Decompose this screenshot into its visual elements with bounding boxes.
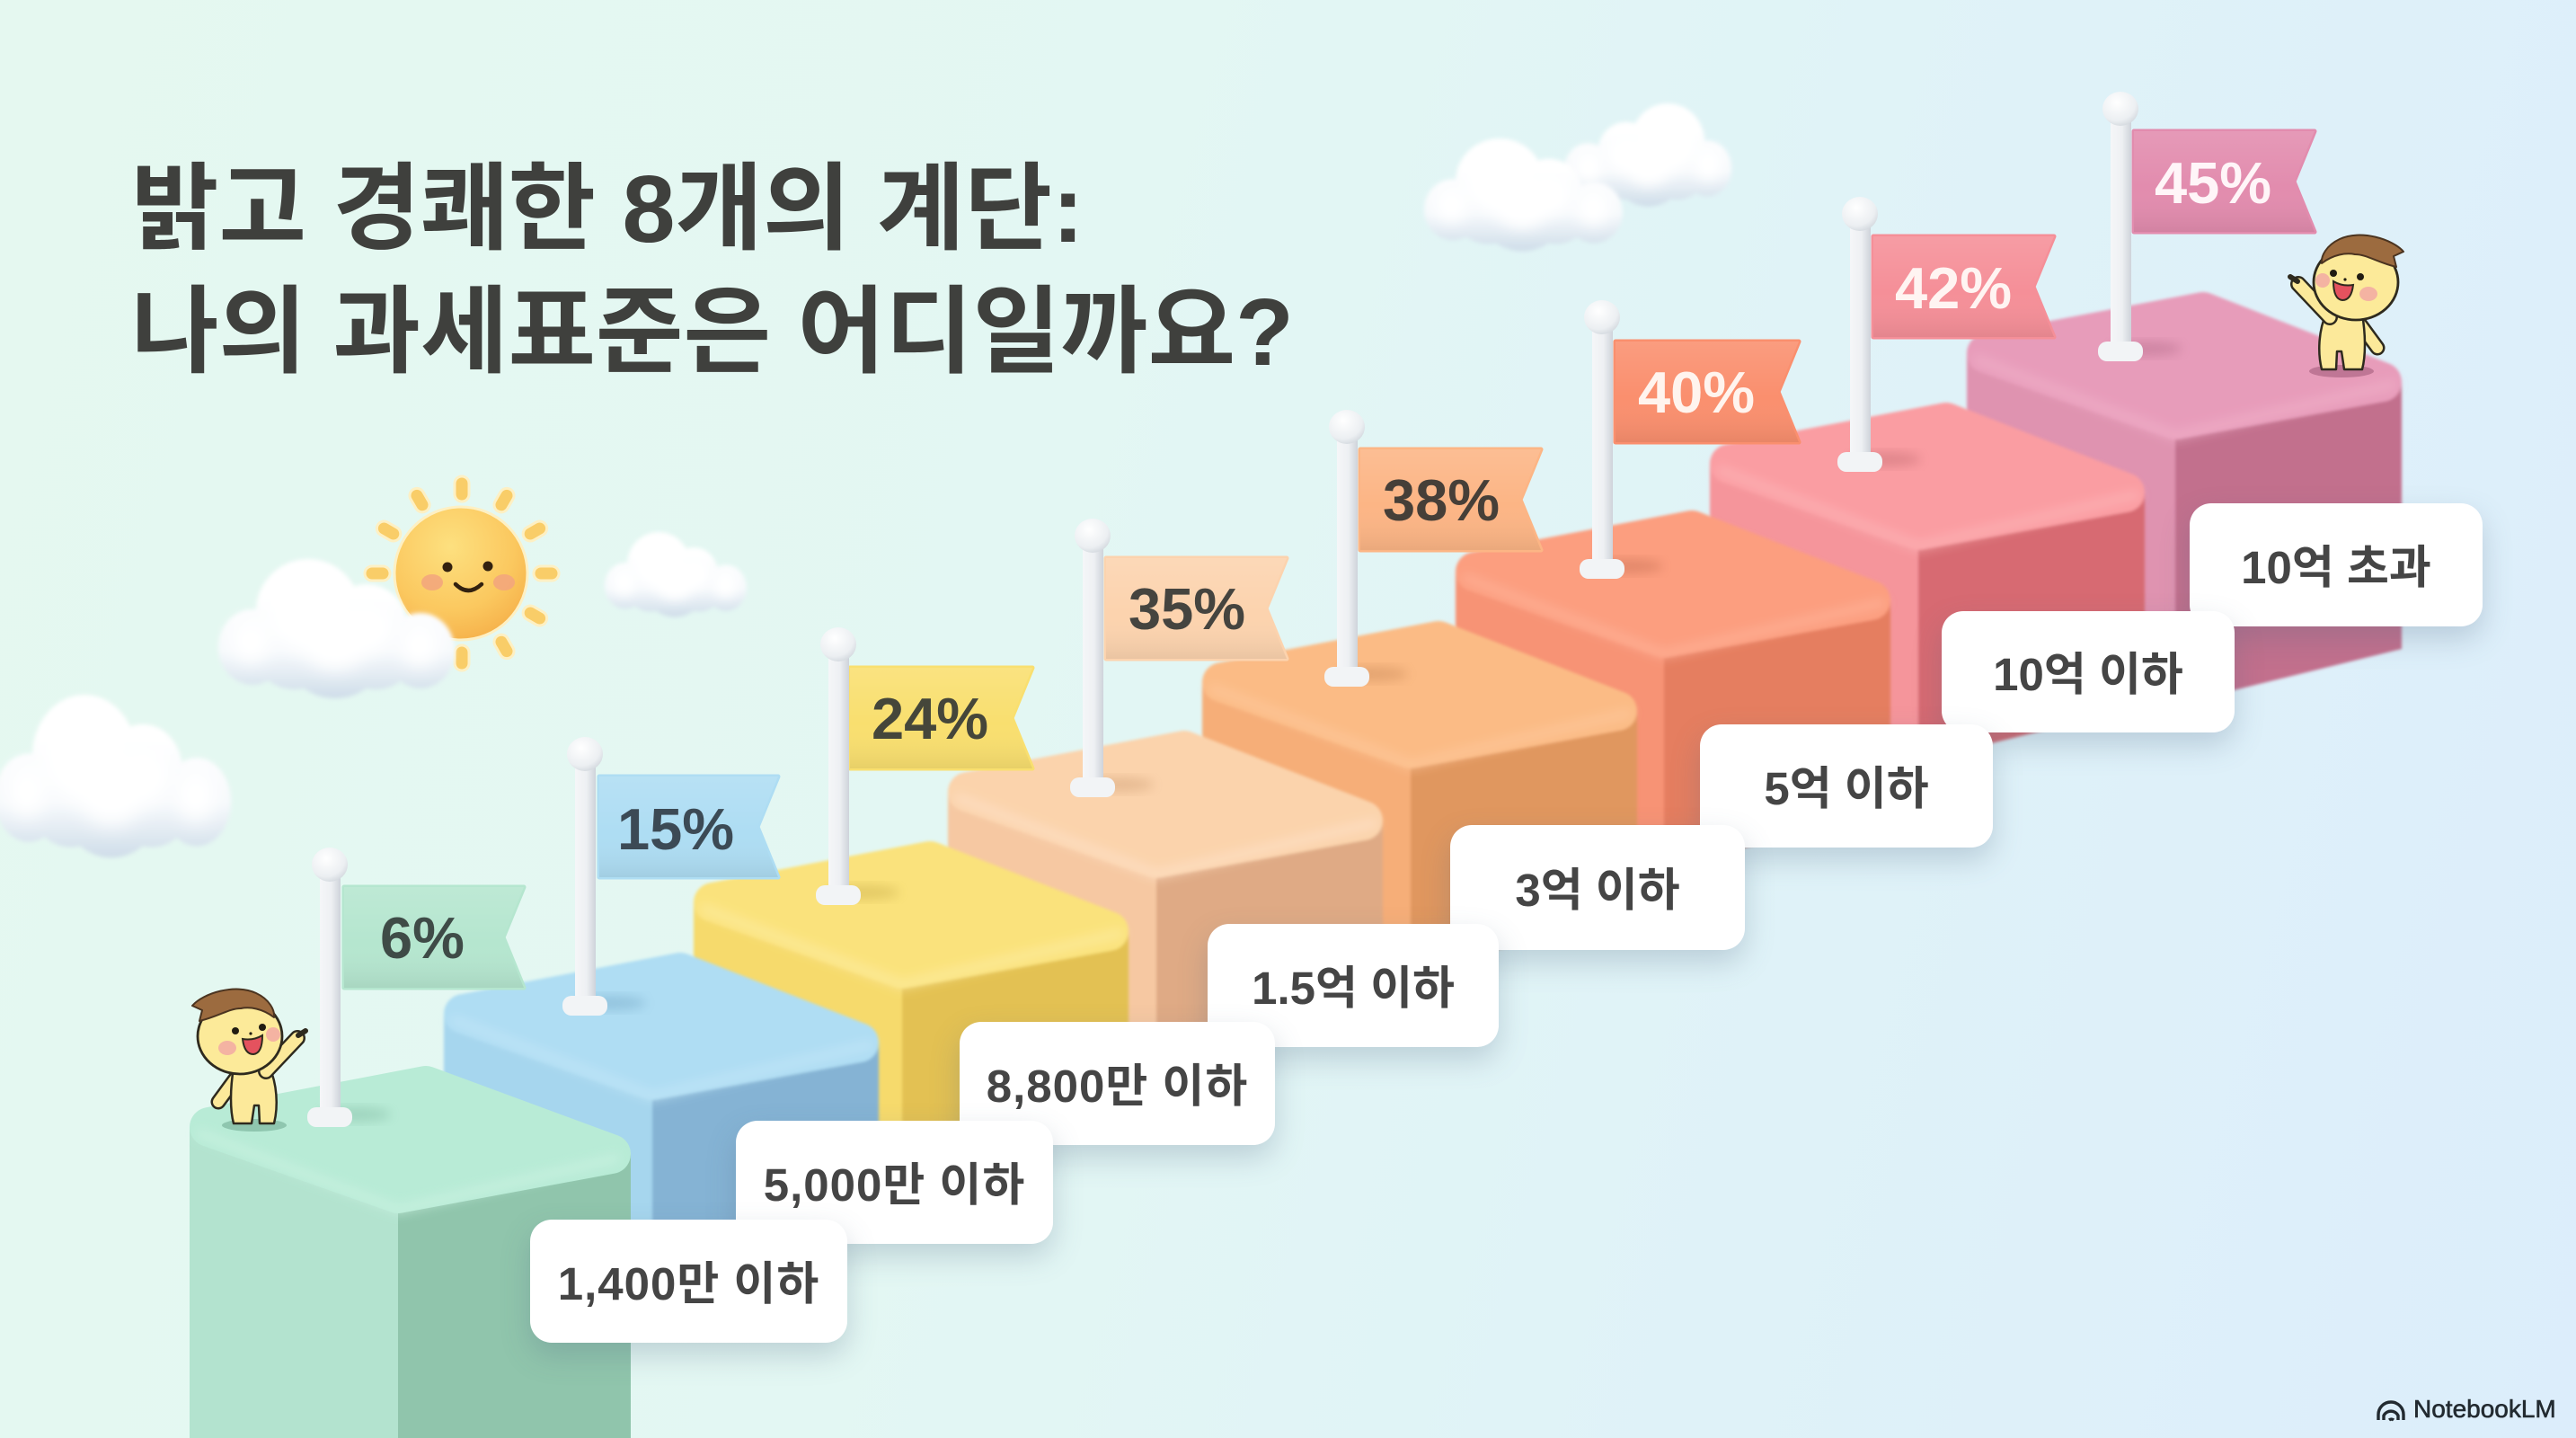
cloud: in front of sun bbox=[218, 559, 455, 698]
label: 3억 이하 bbox=[1450, 825, 1745, 950]
flag: 40%: 40% bbox=[1638, 360, 1755, 425]
flag: 15% bbox=[562, 737, 778, 1016]
flag: 35%: 35% bbox=[1129, 576, 1245, 642]
cloud: far left bbox=[0, 695, 231, 857]
stair block 7: rose bbox=[1710, 422, 2145, 761]
title: 밝고 경쾌한 8개의 계단: bbox=[131, 156, 1084, 262]
character: right, pointing at flag bbox=[2290, 235, 2403, 377]
flag: 24% bbox=[816, 627, 1032, 905]
flag: 38%: 38% bbox=[1383, 467, 1500, 533]
label: 1,400만 이하: 1,400만 이하 bbox=[558, 1258, 819, 1309]
flag: 24%: 24% bbox=[872, 686, 988, 751]
label: 5,000만 이하: 5,000만 이하 bbox=[764, 1159, 1025, 1210]
logo: NotebookLM: NotebookLM bbox=[2413, 1395, 2556, 1423]
cloud: top pair front bbox=[1424, 138, 1623, 252]
label: 5,000만 이하 bbox=[736, 1121, 1053, 1244]
label: 1.5억 이하: 1.5억 이하 bbox=[1252, 962, 1455, 1014]
flag: 35% bbox=[1070, 519, 1287, 797]
flag: 42% bbox=[1837, 197, 2054, 472]
label: 10억 초과 bbox=[2190, 503, 2483, 626]
label: 5억 이하: 5억 이하 bbox=[1764, 762, 1929, 814]
stair block 1: green bbox=[190, 1086, 631, 1438]
cloud: top pair back bbox=[1563, 103, 1731, 207]
stair block 5: orange bbox=[1202, 641, 1637, 971]
flag: 15%: 15% bbox=[617, 796, 734, 862]
flag: 6%: 6% bbox=[380, 905, 465, 971]
label: 8,800만 이하 bbox=[960, 1022, 1275, 1145]
flag: 45% bbox=[2098, 92, 2315, 361]
label: 1,400만 이하 bbox=[530, 1220, 847, 1343]
stair block 4: peach bbox=[948, 750, 1383, 1062]
label: 8,800만 이하: 8,800만 이하 bbox=[987, 1061, 1248, 1111]
stair block 8: pink bbox=[1967, 312, 2402, 705]
label: 5억 이하 bbox=[1700, 724, 1993, 848]
title bbox=[131, 156, 1294, 386]
label: 1.5억 이하 bbox=[1208, 924, 1499, 1047]
stair block 6: coral bbox=[1456, 530, 1890, 867]
stair block 2: blue bbox=[444, 972, 879, 1248]
flag: 40% bbox=[1580, 300, 1799, 579]
flag: 6% bbox=[307, 848, 524, 1127]
label: 3억 이하: 3억 이하 bbox=[1515, 865, 1680, 915]
label: 10억 이하 bbox=[1942, 611, 2235, 732]
title: 나의 과세표준은 어디일까요? bbox=[131, 280, 1294, 386]
label: 10억 이하: 10억 이하 bbox=[1993, 649, 2183, 699]
label: 10억 초과: 10억 초과 bbox=[2241, 541, 2431, 593]
flag: 42%: 42% bbox=[1895, 255, 2012, 321]
flag: 45%: 45% bbox=[2155, 150, 2271, 216]
flag: 38% bbox=[1324, 410, 1541, 687]
character: left, pointing at flag bbox=[192, 990, 305, 1132]
cloud: small near sun bbox=[605, 532, 747, 617]
stair block 3: yellow bbox=[694, 861, 1129, 1155]
icon: smiling sun bbox=[365, 476, 559, 670]
